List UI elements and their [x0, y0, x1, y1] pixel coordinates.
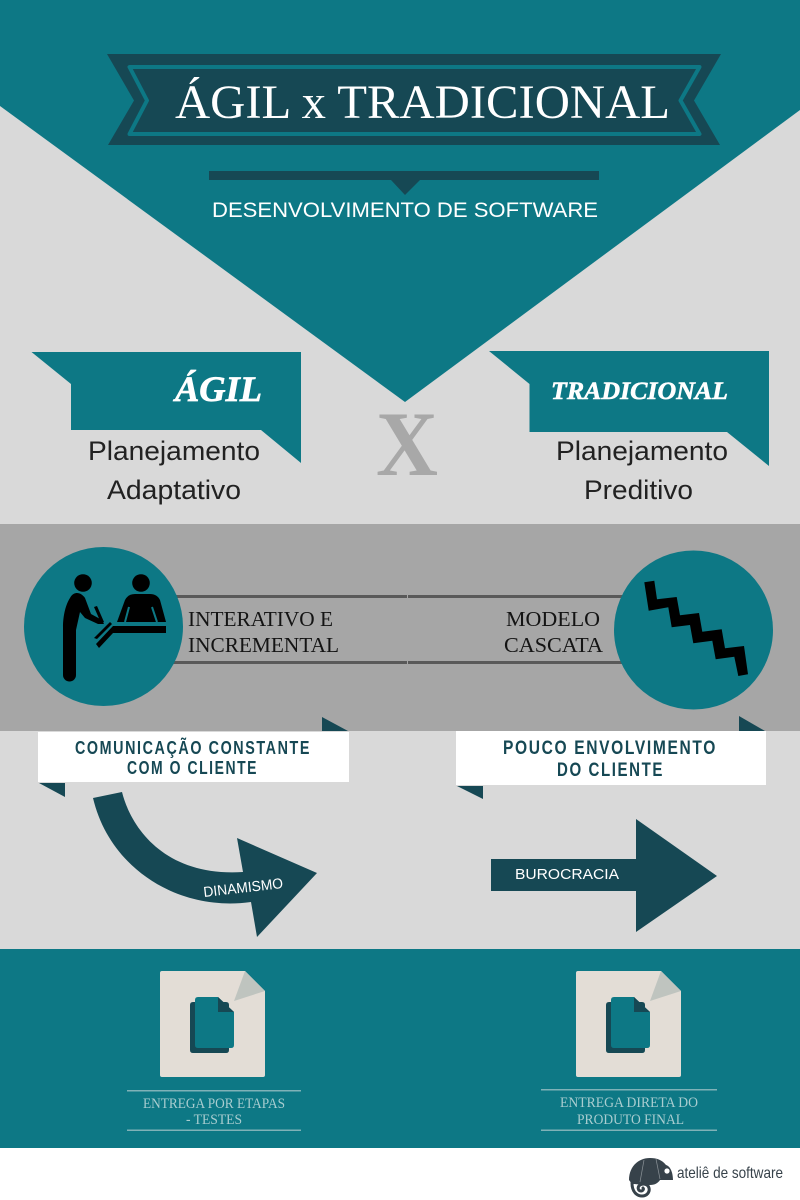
icon: document	[576, 971, 681, 1077]
ribbon: constant communication: COMUNICAÇÃO CONSTANTE	[75, 737, 311, 758]
panel: staged delivery	[127, 971, 301, 1131]
straight arrow: bureaucracy: BUROCRACIA	[515, 866, 619, 883]
ribbon: constant communication	[38, 717, 349, 797]
traditional description: Preditivo	[584, 475, 693, 505]
agile process label: INCREMENTAL	[188, 633, 339, 657]
icon: people at a table	[24, 547, 183, 706]
logo	[629, 1158, 783, 1196]
panel: direct delivery	[541, 971, 717, 1131]
traditional description: Planejamento	[556, 436, 728, 466]
waterfall process label: CASCATA	[504, 633, 604, 657]
traditional flag	[489, 351, 769, 466]
delivery caption: - TESTES	[186, 1112, 242, 1128]
ribbon: little client involvement: DO CLIENTE	[557, 760, 664, 781]
icon: document	[160, 971, 265, 1077]
icon: waterfall stairs	[614, 550, 773, 710]
waterfall process label: MODELO	[506, 607, 600, 631]
white base strip	[0, 1148, 800, 1200]
icon: chameleon	[629, 1158, 673, 1196]
subtitle: DESENVOLVIMENTO DE SOFTWARE	[212, 199, 598, 222]
delivery rules	[127, 1090, 301, 1131]
title text: ÁGIL x TRADICIONAL	[175, 76, 670, 129]
footer band	[0, 949, 800, 1148]
title banner	[107, 54, 721, 145]
ribbon: little client involvement	[456, 716, 766, 799]
panel: traditional planning	[489, 351, 769, 505]
panel: agile planning	[32, 352, 301, 505]
traditional heading: TRADICIONAL	[551, 378, 728, 405]
ribbon: constant communication: COM O CLIENTE	[127, 758, 258, 778]
agile description: Adaptativo	[107, 475, 241, 505]
agile heading: ÁGIL	[173, 369, 262, 409]
subtitle divider with pointer	[209, 171, 599, 195]
logo wordmark: ateliê de software	[677, 1165, 783, 1182]
straight arrow: bureaucracy	[491, 819, 717, 932]
ribbon: little client involvement: POUCO ENVOLVIMENTO	[503, 738, 717, 759]
curved arrow: dynamism: DINAMISMO	[203, 876, 284, 901]
delivery caption: ENTREGA DIRETA DO	[560, 1095, 698, 1111]
delivery rules	[541, 1089, 717, 1131]
agile process label: INTERATIVO E	[188, 607, 333, 631]
agile description: Planejamento	[88, 436, 260, 466]
agile flag	[32, 352, 301, 463]
curved arrow: dynamism	[93, 792, 317, 937]
delivery caption: ENTREGA POR ETAPAS	[143, 1096, 285, 1112]
delivery caption: PRODUTO FINAL	[577, 1112, 684, 1128]
versus X: X	[376, 393, 438, 495]
header triangle background	[0, 0, 800, 402]
band rules	[170, 595, 623, 664]
process band	[0, 524, 800, 731]
